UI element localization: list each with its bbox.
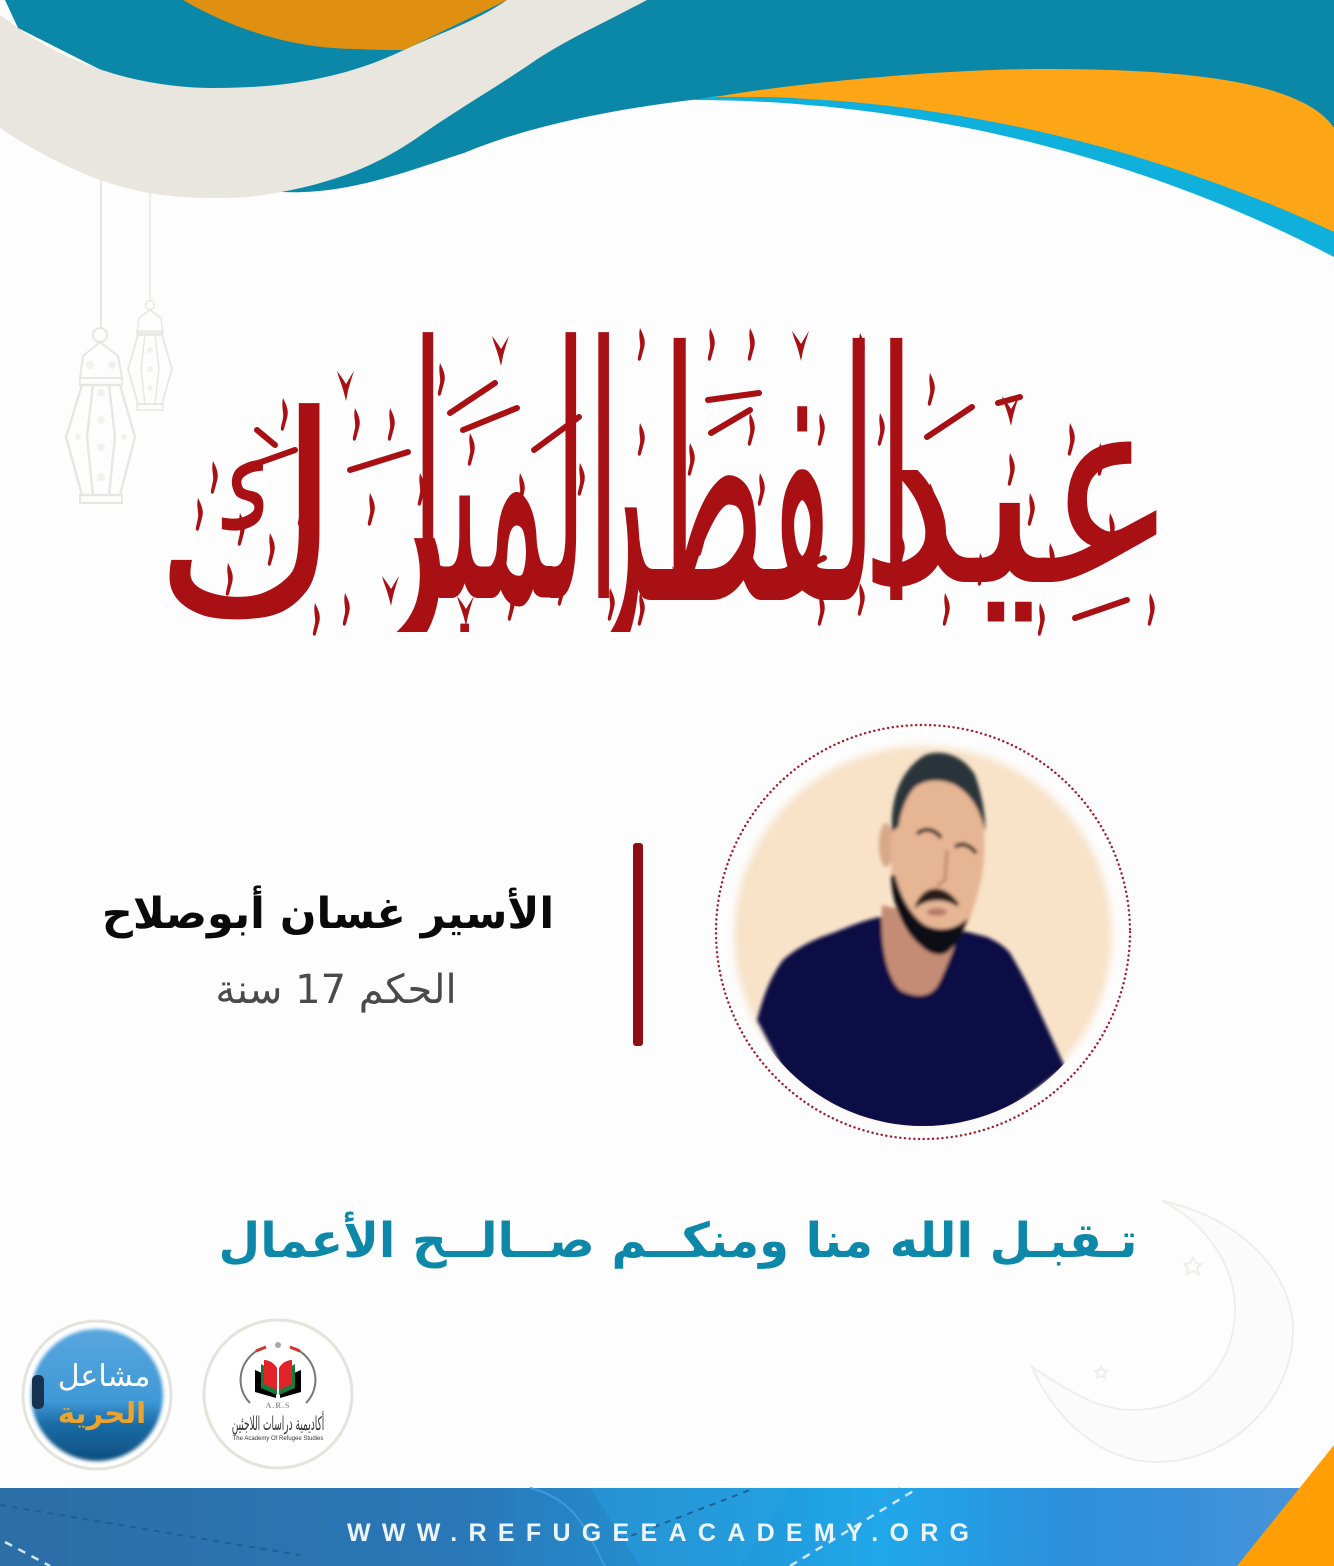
face — [891, 775, 984, 950]
nose shadow — [937, 850, 947, 886]
moustache — [917, 890, 958, 905]
neck — [882, 905, 962, 995]
eyes — [917, 830, 976, 853]
shirt — [757, 917, 1065, 1140]
hair — [892, 753, 985, 832]
icon: large lantern — [66, 180, 135, 503]
orange wave — [715, 69, 1334, 232]
icon: star — [1184, 1258, 1201, 1274]
greeting line: تـقبـل الله منا ومنكــم صــالــح الأعمال — [219, 1211, 1137, 1269]
ear — [879, 823, 893, 867]
icon: arcs and figure — [241, 1350, 315, 1403]
cyan wave — [694, 96, 1334, 257]
beige wave — [0, 0, 647, 198]
sentence text: الحكم 17 سنة — [215, 967, 457, 1013]
beard — [891, 875, 968, 955]
portrait background — [734, 746, 1112, 1124]
teal wave — [5, 0, 1334, 200]
prisoner name: الأسير غسان أبوصلاح — [102, 885, 554, 939]
title word part: rak: رك — [153, 357, 454, 679]
title calligraphy: Eid al-Fitr Mubarak — [170, 328, 1156, 636]
title word: al-Fitr: الفطر — [577, 280, 915, 686]
orange corner — [1237, 1445, 1334, 1566]
portrait photo — [716, 725, 1130, 1140]
logo: Mashael al-Hurriya — [23, 1321, 171, 1469]
title word part: al-Muba: المبا — [411, 274, 620, 681]
logo word white: مشاعل — [58, 1359, 150, 1394]
icon: hanging lanterns — [66, 180, 172, 503]
icon: open book — [255, 1360, 301, 1398]
logo English name: The Academy Of Refugee Studies — [233, 1436, 323, 1442]
dark orange wave — [183, 0, 507, 50]
icon: small lantern — [128, 180, 172, 410]
vertical divider — [633, 843, 643, 1046]
logo initials: A.R.S — [265, 1401, 291, 1410]
icon: crescent moon — [1032, 1201, 1293, 1462]
icon: small star — [1095, 1367, 1107, 1378]
logo word orange: الحرية — [58, 1396, 146, 1430]
ornamental calligraphy marks — [196, 328, 1155, 636]
lips — [927, 908, 947, 916]
logo Arabic name: أكاديمية دراسات اللاجئين — [232, 1411, 324, 1435]
top wave banner — [0, 0, 1334, 257]
logo: Academy of Refugee Studies — [204, 1320, 352, 1468]
title word: Eid: عيد — [859, 331, 1179, 646]
website url: WWW.REFUGEEACADEMY.ORG — [347, 1519, 969, 1547]
title letters clipped at baseline — [170, 332, 902, 632]
dotted ring — [716, 725, 1130, 1139]
footer band — [0, 1445, 1334, 1566]
portrait figure — [757, 753, 1065, 1140]
